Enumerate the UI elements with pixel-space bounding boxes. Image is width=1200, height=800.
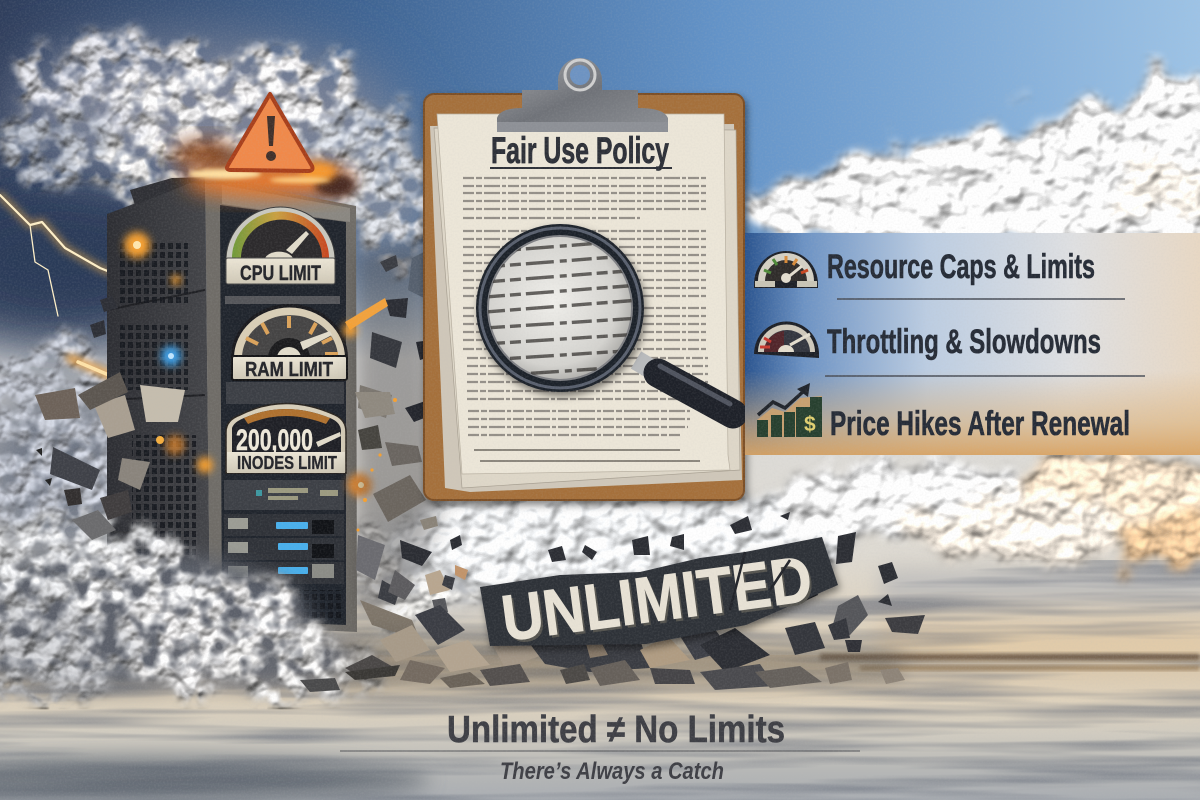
debris: left of server	[35, 296, 185, 540]
gauge: CPU limit: CPU LIMIT	[240, 262, 321, 285]
haze under lower cloud bank	[0, 550, 370, 690]
fire above server	[171, 139, 355, 198]
rubble pile along the ground	[300, 512, 925, 692]
sunny clouds right	[390, 75, 1200, 590]
lightning bolts	[0, 195, 135, 386]
paper stack	[430, 124, 742, 492]
clipboard board	[424, 94, 744, 500]
gauge: inodes limit	[226, 404, 346, 473]
debris: right of server	[343, 240, 468, 640]
storm clouds upper left	[0, 33, 470, 630]
metal clip	[497, 58, 668, 132]
subtitle: There’s Always a Catch	[500, 758, 724, 785]
glowing status sparks	[161, 346, 181, 366]
gauge: RAM limit: RAM LIMIT	[245, 359, 333, 381]
panel: hidden catches list	[745, 233, 1200, 455]
document title: Fair Use Policy	[491, 130, 669, 171]
magnifier handle	[636, 360, 733, 414]
policy body text lines	[463, 178, 708, 435]
gauge: CPU limit	[226, 207, 335, 285]
flying chips	[548, 512, 898, 606]
server front face	[205, 177, 357, 632]
magnifying glass	[476, 224, 733, 414]
front sheet	[437, 114, 730, 474]
cloud bank over server base	[0, 515, 380, 700]
server rack	[107, 177, 372, 632]
tagline: Unlimited is not No Limits: Unlimited ≠ No Limits	[447, 709, 785, 751]
icon: throttling gauge	[754, 322, 819, 358]
icon: rising price chart: $	[804, 413, 816, 436]
broken UNLIMITED sign: UNLIMITED	[500, 544, 819, 658]
icon: rising price chart	[757, 383, 822, 437]
gauge: inodes limit: INODES LIMIT	[237, 453, 337, 473]
server drive bays and lights	[224, 480, 344, 620]
warning triangle icon	[227, 94, 312, 171]
magnified text in lens	[485, 240, 640, 376]
broken UNLIMITED sign: UNLIMITED	[497, 542, 816, 655]
server side panel	[107, 177, 210, 610]
haze under storm clouds	[0, 40, 530, 610]
clipboard with policy	[424, 58, 744, 500]
icon: resource gauge	[754, 251, 818, 288]
tagline: Unlimited is not No Limits	[340, 709, 860, 785]
gauge: RAM limit	[231, 304, 348, 381]
gauge: inodes limit: 200,000	[236, 424, 313, 457]
